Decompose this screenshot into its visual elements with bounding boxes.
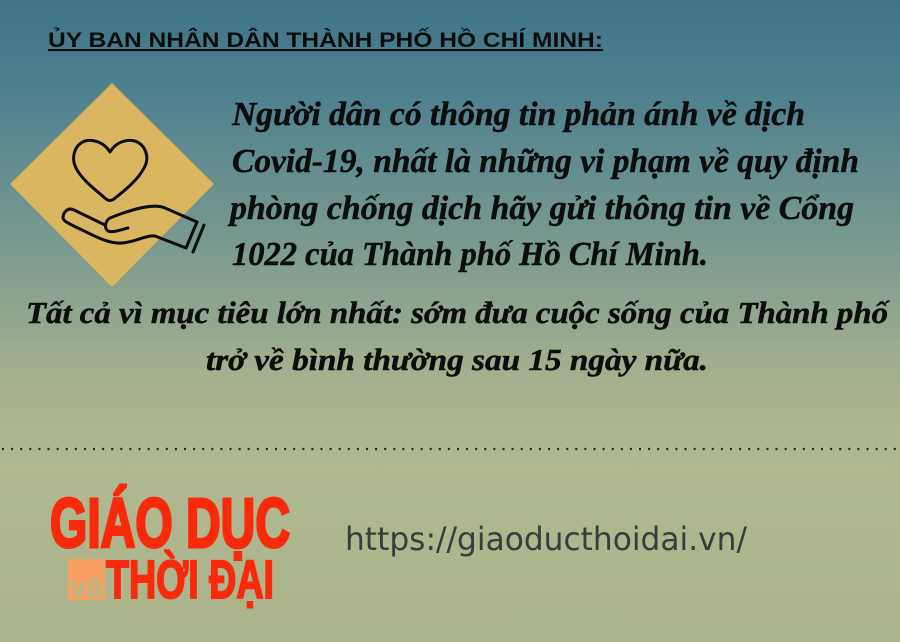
closing message text: Tất cả vì mục tiêu lớn nhất: sớm đưa cuộc sống của Thành phố bbox=[26, 295, 891, 330]
logo bbox=[50, 484, 290, 610]
main message text: 1022 của Thành phố Hồ Chí Minh. bbox=[232, 236, 708, 273]
main message text bbox=[227, 96, 859, 273]
logo: và badge: và bbox=[70, 571, 103, 604]
heading: ỦY BAN NHÂN DÂN THÀNH PHỐ HỒ CHÍ MINH: bbox=[48, 28, 603, 52]
main message text: Người dân có thông tin phản ánh về dịch bbox=[231, 96, 805, 133]
icon: diamond with heart in hand bbox=[10, 83, 214, 287]
main message text: phòng chống dịch hãy gửi thông tin về Cổng bbox=[227, 190, 854, 227]
icon: open hand bbox=[63, 206, 204, 252]
website url: https://giaoducthoidai.vn/ bbox=[345, 520, 747, 558]
main message text: Covid-19, nhất là những vi phạm về quy định bbox=[232, 143, 859, 180]
icon: heart bbox=[74, 140, 147, 200]
logo: giáo dục: GIÁO DỤC bbox=[50, 484, 290, 562]
logo: thời đại: THỜI ĐẠI bbox=[106, 550, 274, 610]
closing message text: trở về bình thường sau 15 ngày nữa. bbox=[206, 342, 708, 377]
closing message text bbox=[26, 295, 891, 377]
logo: và badge bbox=[68, 559, 105, 604]
